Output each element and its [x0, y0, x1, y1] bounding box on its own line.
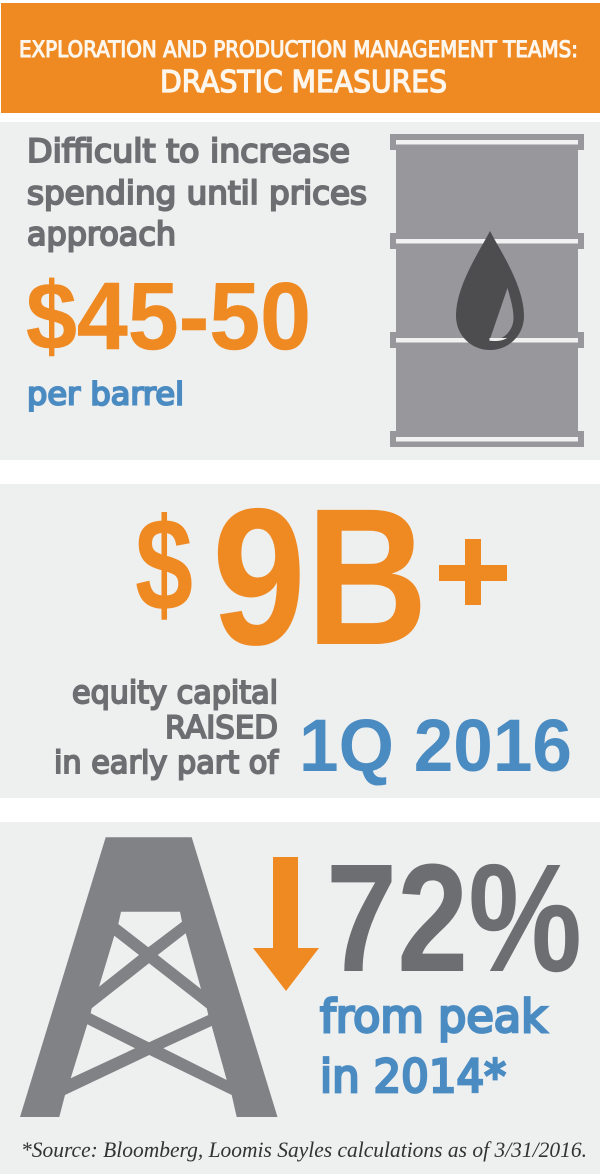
text: difficult to increase spending: approach	[27, 215, 176, 253]
text: equity capital raised: RAISED	[165, 710, 278, 746]
text: equity capital raised: in early part of	[54, 745, 279, 781]
plus sign	[439, 539, 507, 605]
icon: oil barrel	[390, 134, 584, 447]
panel: equity capital	[0, 468, 600, 798]
text: difficult to increase spending: spending until prices	[27, 174, 367, 212]
text: difficult to increase spending: Difficult to increase	[27, 132, 350, 170]
figure: 9B: 9B	[212, 468, 428, 686]
panel: price threshold	[0, 122, 600, 460]
per barrel label: per barrel	[27, 376, 184, 412]
dollar sign: $	[135, 491, 193, 638]
icon: oil drop	[456, 231, 524, 350]
header banner	[1, 3, 600, 113]
text: equity capital raised	[54, 675, 279, 781]
source note: *Source: Bloomberg, Loomis Sayles calculations as of 3/31/2016.	[21, 1137, 587, 1162]
arrow: down	[253, 857, 319, 991]
text: from peak in 2014: in 2014*	[320, 1050, 506, 1103]
text: difficult to increase spending	[27, 132, 367, 253]
text: from peak in 2014: from peak	[320, 990, 547, 1043]
text: equity capital raised: equity capital	[72, 675, 278, 711]
period: 1Q 2016: 1Q 2016	[299, 704, 572, 787]
price figure: $45-50	[26, 263, 311, 370]
panel: rig count decline	[0, 822, 600, 1174]
text: from peak in 2014	[320, 990, 547, 1103]
icon: oil derrick	[20, 837, 278, 1117]
header title: DRASTIC MEASURES	[160, 65, 447, 100]
